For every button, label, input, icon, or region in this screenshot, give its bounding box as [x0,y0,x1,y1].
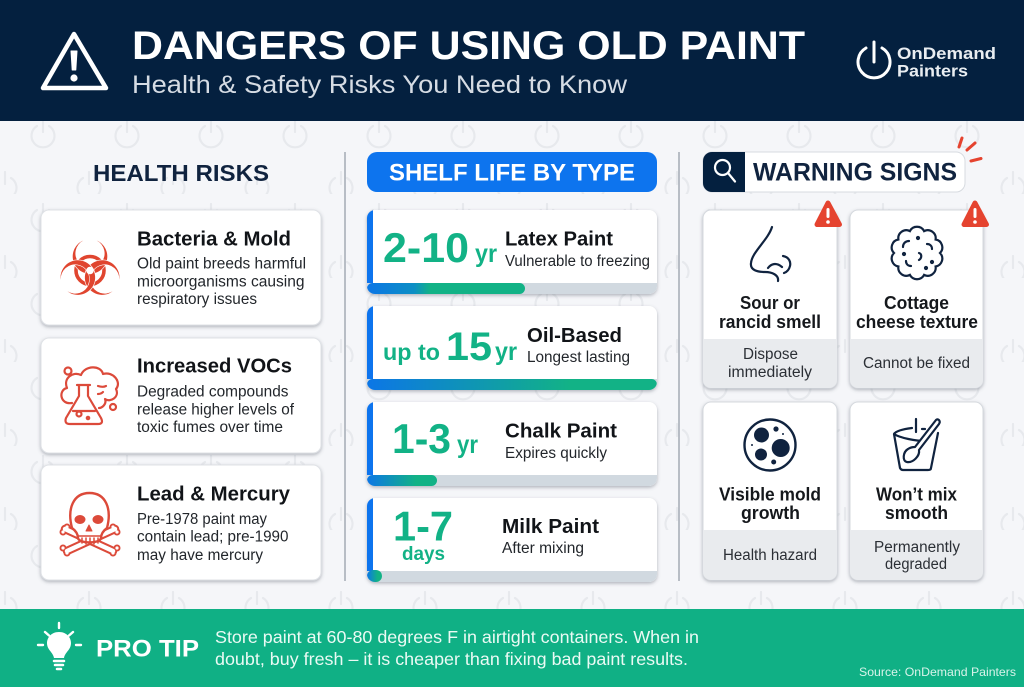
shelf life value: yr [457,431,478,459]
pro tip label: PRO TIP [96,636,199,663]
progress bar [367,475,437,486]
sign label: Cottage [884,293,949,313]
paint name and note [505,420,617,462]
paint name and note: Milk Paint [502,515,599,538]
icon: alert rays [959,138,981,161]
sign label [856,293,978,332]
paint name and note: Vulnerable to freezing [505,253,650,270]
card description: respiratory issues [137,291,257,308]
sign label: Won’t mix [876,485,957,505]
panel: oil-based paint [367,306,657,390]
panel: won't mix smooth [850,402,983,580]
icon: light bulb [38,623,81,669]
sign label: rancid smell [719,312,821,332]
subtitle: Health & Safety Risks You Need to Know [132,71,628,99]
panel: milk paint [367,498,657,582]
paint name and note: Longest lasting [527,349,630,366]
shelf life value: 2-10 [383,224,469,271]
shelf life value: up to [383,339,440,365]
sign action: Cannot be fixed [863,355,970,372]
icon: warning triangle [43,34,106,88]
logo: OnDemand Painters: OnDemand [897,45,996,63]
shelf life value: days [402,543,445,565]
tip text: doubt, buy fresh – it is cheaper than fixing bad paint results. [215,649,688,669]
sign label: smooth [885,503,948,523]
header banner [0,0,1024,121]
sign label [876,485,957,523]
icon: petri dish [744,420,796,470]
icon: magnifier [715,160,735,182]
sign action: Health hazard [723,547,817,564]
paint name and note: Chalk Paint [505,420,617,443]
sign label [719,485,821,523]
icon: biohazard [55,240,125,300]
card description [137,511,289,564]
card description: toxic fumes over time [137,419,283,436]
paint name and note [527,324,630,366]
heading: health risks: HEALTH RISKS [93,160,269,186]
sign action: Dispose [743,346,798,363]
footer: pro tip [0,609,1024,687]
card description: microorganisms causing [137,274,304,290]
sign label: growth [741,503,800,523]
card title: Increased VOCs [137,355,292,378]
sign action [874,539,960,573]
shelf life value: yr [475,240,497,268]
icon: skull and crossbones [60,493,120,556]
icon: red alert [964,203,986,224]
paint name and note [505,228,650,270]
card description: may have mercury [137,547,263,564]
shelf life value [383,325,517,369]
sign label: Sour or [740,293,800,313]
panel: increased VOCs [41,338,321,453]
icon: cup and spoon [894,419,940,470]
card title: Bacteria & Mold [137,228,291,250]
progress bar [367,283,525,294]
heading: shelf life by type: SHELF LIFE BY TYPE [389,160,635,187]
shelf life value: yr [495,338,517,366]
panel: latex paint [367,210,657,294]
card description: release higher levels of [137,402,295,418]
card description: Degraded compounds [137,384,289,401]
card description: Pre-1978 paint may [137,511,267,528]
paint name and note [502,515,599,557]
logo: OnDemand Painters: Painters [897,62,968,80]
shelf life value: 1-7 [393,503,453,550]
panel: cottage cheese texture [850,203,986,388]
card description: contain lead; pre-1990 [137,529,289,546]
panel: visible mold growth [703,402,837,580]
heading: warning signs: WARNING SIGNS [753,159,957,187]
panel: lead and mercury [41,465,321,580]
card title: Lead & Mercury [137,483,291,506]
logo: OnDemand Painters [858,42,996,80]
card description: Old paint breeds harmful [137,256,306,272]
shelf life value: 1-3 [392,415,451,462]
shelf life value: 15 [446,325,492,369]
tip text: Store paint at 60-80 degrees F in airtight containers. When in [215,627,699,647]
sign label: cheese texture [856,312,978,332]
icon: red alert [817,203,840,224]
title: DANGERS OF USING OLD PAINT [132,24,805,68]
source credit: Source: OnDemand Painters [859,665,1016,679]
card description [137,384,295,436]
icon: lumpy texture [892,227,942,279]
paint name and note: After mixing [502,540,584,557]
heading: warning signs [703,138,981,192]
panel: bacteria and mold [41,210,321,325]
sign action: Permanently [874,539,960,556]
panel: chalk paint [367,402,657,486]
sign label: Visible mold [719,485,821,505]
heading: shelf life by type [367,152,657,192]
panel: sour or rancid smell [703,203,840,388]
paint name and note: Oil-Based [527,324,622,347]
progress bar [367,379,657,390]
paint name and note: Latex Paint [505,228,613,251]
sign action [728,346,812,381]
tip text [215,627,699,669]
icon: flask with fumes [61,367,118,424]
icon: nose [751,227,790,281]
progress bar [367,570,382,582]
card description [137,256,306,308]
sign action: degraded [885,556,947,573]
paint name and note: Expires quickly [505,445,607,462]
sign action: immediately [728,364,812,381]
sign label [719,293,821,332]
